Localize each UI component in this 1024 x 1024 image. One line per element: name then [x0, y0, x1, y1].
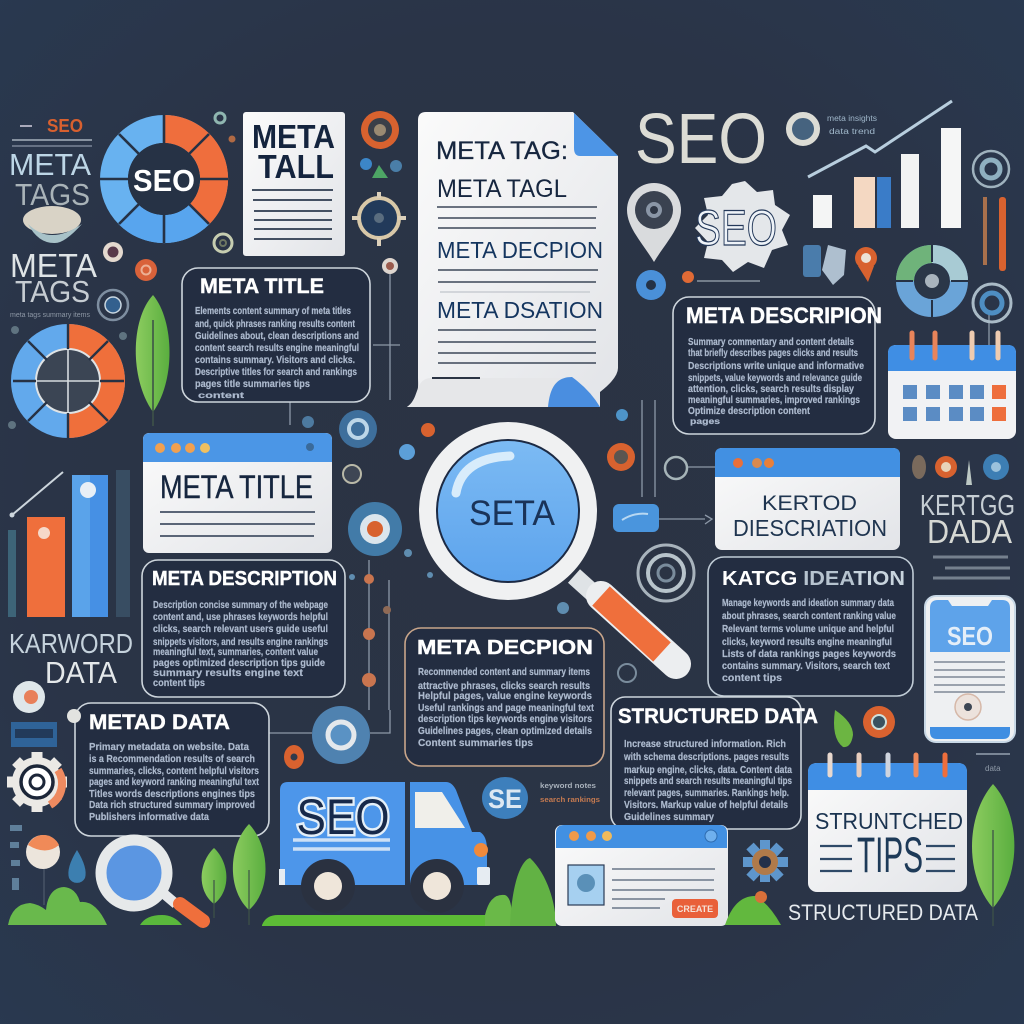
- left heading: META TAGS lower: [10, 247, 97, 319]
- text block: meta title body: and, quick phrases ranking results content: [195, 318, 355, 330]
- text block: meta description left body: content and, use phrases keywords helpful: [153, 611, 328, 623]
- icon: orange pin: [855, 247, 877, 282]
- text block: meta description left body: content tips: [153, 677, 205, 689]
- text block: meta title body: Elements content summary of meta titles: [195, 305, 351, 317]
- text block: centre body: Guidelines pages, clean optimized details: [418, 725, 592, 737]
- icon: target with orange core: [348, 502, 402, 556]
- panel: keyword ideation: [708, 557, 913, 696]
- icons: small pair right of browser: [912, 454, 1009, 485]
- icon: green leaf right: [972, 784, 1014, 926]
- icon: SEO gear badge: [695, 181, 790, 272]
- text block: metad data body: summaries, clicks, content helpful visitors: [89, 765, 259, 777]
- icon: orange ring lens right: [607, 443, 635, 471]
- text block: meta title body: Descriptive titles for search and rankings: [195, 366, 357, 378]
- phone: [925, 596, 1015, 742]
- browser card: keyword description: DIESCRIATION: [733, 515, 887, 541]
- icon: blue connector: [613, 504, 659, 532]
- text block: structured data body: relevant pages, summaries. Rankings help.: [624, 787, 789, 799]
- text block: structured data body: [623, 738, 792, 823]
- button: [672, 899, 718, 918]
- calendar: right: [888, 333, 1016, 439]
- thumbnail: [568, 865, 604, 905]
- text block: keyword ideation body: Relevant terms volume unique and helpful: [722, 623, 894, 635]
- icon: ring lens right small: [616, 409, 687, 479]
- text block: metad data body: Primary metadata on website. Data: [89, 741, 249, 753]
- panel: meta decription centre: [405, 628, 604, 766]
- bush centre: [485, 858, 556, 926]
- text block: meta description left body: clicks, search relevant users guide useful: [153, 623, 328, 635]
- hills and balloon left: [8, 835, 182, 925]
- calendar: structured tips: STRUNTCHED: [815, 808, 963, 834]
- icon: orange drop: [284, 745, 304, 769]
- left heading: META TAGS lower: meta tags summary items: [10, 312, 90, 319]
- icon: paper cloud: [23, 206, 82, 243]
- icon: triangle cluster: [360, 158, 402, 178]
- text block: structured data body: Increase structured information. Rich: [624, 738, 786, 750]
- text block: meta description right body: Optimize description content: [688, 405, 810, 417]
- text block: centre body: description tips keywords engine visitors: [418, 713, 592, 725]
- icon: blue SE badge: [482, 777, 528, 819]
- text block: centre body: Recommended content and summary items: [418, 666, 590, 678]
- caption: orange note: keyword notes: [540, 781, 596, 790]
- text block: meta description right body: attention, clicks, search results display: [688, 383, 854, 395]
- icon: blue gear eye: [743, 840, 788, 903]
- icon: folded corner: [574, 113, 618, 156]
- text block: metad data body: Data rich structured summary improved: [89, 799, 255, 811]
- heading: meta description right: META DESCRIPION: [686, 303, 882, 328]
- text block: keyword ideation body: Lists of data rankings pages keywords: [722, 648, 896, 660]
- chart: left bars: [8, 470, 130, 617]
- donut: SEO: SEO: [133, 163, 195, 198]
- caption: chart note: data trend: [829, 127, 875, 136]
- heading: keyword ideation: KATCG IDEATION: [722, 568, 905, 590]
- text block: meta title body: content: [198, 391, 245, 400]
- icon: blue target circle: [312, 706, 370, 764]
- decorative connector lines: [269, 270, 989, 733]
- truck: [279, 782, 490, 913]
- icon: blue SE badge: SE: [488, 784, 522, 814]
- text block: meta description left body: [153, 599, 328, 689]
- text block: meta description left body: pages optimized description tips guide: [153, 657, 325, 669]
- icon: green leaf small: [834, 710, 853, 747]
- icon: gear left: [7, 752, 67, 812]
- text block: metad data body: [89, 741, 259, 823]
- text block: meta title body: Guidelines about, clean descriptions and: [195, 330, 359, 342]
- text block: meta description right body: that briefly describes pages clicks and results: [688, 347, 858, 359]
- heading: structured data: STRUCTURED DATA: [618, 705, 818, 728]
- calendar: structured tips: [808, 755, 967, 892]
- chart: rising bars: [808, 101, 961, 228]
- heading: meta description left: META DESCRIPTION: [152, 568, 337, 590]
- text block: meta title body: contains summary. Visitors and clicks.: [195, 354, 355, 366]
- connector node: [67, 709, 81, 723]
- page: META TALL: [243, 112, 345, 256]
- browser card: bottom: CREATE: [677, 904, 713, 914]
- panel: meta description left: [142, 560, 345, 697]
- document: meta tags: [407, 112, 618, 407]
- icon: compass badge: [352, 192, 406, 246]
- browser card: bottom: [555, 825, 728, 926]
- heading: big SEO: SEO: [635, 100, 767, 179]
- icon: orange ring: [863, 706, 895, 738]
- icon: SEO gear badge: SEO: [695, 200, 777, 256]
- icon: ring right: [973, 284, 1011, 322]
- icon: small dots lower centre: [349, 549, 636, 682]
- icon: target badge: [103, 242, 123, 262]
- text block: meta title body: content search results engine meaningful: [195, 342, 359, 354]
- icon: blue ring centre left: [339, 410, 377, 448]
- icon: blue ring: [98, 290, 128, 320]
- icon: location pin: [627, 183, 681, 262]
- left heading: META TAGS lower: META: [10, 247, 97, 284]
- truck: SEO: [296, 789, 390, 845]
- page: META TALL: TALL: [258, 148, 334, 185]
- icon: orange dot line: [682, 271, 760, 283]
- document: meta tags: META DSATION: [437, 297, 603, 323]
- left heading: META TAGS upper: [9, 147, 91, 212]
- panel: structured data: [611, 697, 818, 829]
- heading: KARWORD DATA left: DATA: [45, 655, 117, 690]
- caption: orange note: search rankings: [540, 795, 600, 804]
- left heading: small SEO: SEO: [47, 116, 83, 136]
- heading: meta decpion centre: META DECPION: [417, 637, 593, 659]
- calendar: structured tips: TIPS: [857, 827, 923, 883]
- panel: meta title: [182, 268, 370, 402]
- icon: green leaf left: [136, 295, 170, 426]
- text block: metad data body: Titles words descriptions engines tips: [89, 788, 255, 800]
- left heading: META TAGS upper: META: [9, 147, 91, 182]
- text block: meta description left body: snippets visitors, and results engine rankings: [153, 636, 328, 648]
- left heading: META TAGS lower: TAGS: [15, 274, 90, 309]
- text block: centre body: [418, 666, 594, 749]
- text block: keyword ideation body: contains summary. Visitors, search text: [722, 660, 890, 672]
- text block: keyword ideation body: [722, 597, 896, 684]
- heading: structured data bottom: STRUCTURED DATA: [788, 900, 978, 925]
- text block: meta description left body: meaningful text, summaries, content value: [153, 646, 318, 658]
- text block: structured data body: Visitors. Markup value of helpful details: [624, 799, 788, 811]
- icon: small grey dots: [8, 326, 127, 429]
- trees: [202, 824, 266, 925]
- browser card: keyword description: [715, 448, 900, 550]
- text block: meta description right body: Summary commentary and content details: [688, 336, 854, 348]
- text block: metad data body: Publishers informative data: [89, 811, 209, 823]
- browser card: meta title: [143, 433, 332, 553]
- caption: chart note: [827, 114, 877, 136]
- timeline: orange dots: [362, 574, 391, 687]
- heading: KERTGG DADA right: DADA: [927, 513, 1012, 550]
- text block: centre body: attractive phrases, clicks search results: [418, 680, 590, 692]
- text block: structured data body: markup engine, clicks, data. Content data: [624, 764, 792, 776]
- donut: target: [13, 324, 124, 438]
- icon: badge on line: [382, 258, 398, 274]
- icon: orange ring top: [361, 111, 399, 149]
- bush right of browser: [725, 896, 781, 925]
- document: meta tags: META TAGL: [437, 175, 567, 203]
- ground: [262, 915, 520, 926]
- caption: orange note: [540, 781, 600, 804]
- panel: meta description right: [673, 297, 882, 434]
- text block: meta description left body: Description concise summary of the webpage: [153, 599, 328, 611]
- text block: structured data body: snippets and search results meaningful tips: [624, 775, 792, 787]
- icon: concentric rings: [638, 545, 694, 601]
- caption: right of calendar: [976, 754, 1010, 773]
- phone: SEO: [947, 621, 993, 651]
- left icon: blue strip: [11, 722, 57, 747]
- browser card: keyword description: KERTOD: [762, 492, 857, 515]
- heading: meta title: META TITLE: [200, 275, 324, 298]
- left icon: small notes: [10, 825, 22, 890]
- text block: meta description left body: summary results engine text: [153, 667, 304, 679]
- text block: meta title body: [195, 305, 359, 400]
- icon: ring target top right: [973, 151, 1009, 187]
- icon: small shield cluster: [803, 245, 846, 285]
- panel: metad data: [75, 703, 269, 836]
- text block: meta title body: pages title summaries tips: [195, 378, 310, 390]
- icon: small magnifier: [101, 840, 203, 921]
- heading: KARWORD DATA left: KARWORD: [9, 628, 133, 659]
- text block: metad data body: pages and keyword ranking meaningful text: [89, 776, 259, 788]
- text block: keyword ideation body: clicks, keyword results engine meaningful: [722, 636, 892, 648]
- text block: structured data body: with schema descriptions. pages results: [623, 751, 789, 763]
- text block: centre body: Helpful pages, value engine keywords: [418, 690, 592, 702]
- document: meta tags: META TAG:: [436, 137, 568, 165]
- icon: ring top left: [215, 113, 236, 142]
- text block: keyword ideation body: about phrases, search content ranking value: [722, 610, 896, 622]
- text block: centre body: Content summaries tips: [418, 737, 533, 749]
- icon: blue ring badge: [636, 270, 666, 300]
- text block: centre body: Useful rankings and page meaningful text: [418, 702, 594, 714]
- text block: meta description right body: snippets, value keywords and relevance guide: [688, 372, 862, 384]
- donut: status ring: [896, 245, 968, 317]
- left heading: small SEO: [12, 116, 92, 147]
- page: META TALL: META: [252, 118, 335, 155]
- icon: orange swirl: [135, 259, 157, 281]
- icon: blue droplet: [68, 850, 86, 883]
- caption: right of calendar: data: [985, 764, 1001, 773]
- text block: meta description right body: Descriptions write unique and informative: [688, 360, 864, 372]
- browser card: meta title: META TITLE: [160, 469, 313, 505]
- text block: meta description right body: pages: [690, 417, 721, 426]
- left heading: META TAGS upper: TAGS: [15, 177, 90, 212]
- text block: keyword ideation body: content tips: [722, 672, 782, 684]
- text block: metad data body: is a Recommendation results of search: [89, 753, 255, 765]
- icon: white ring: [789, 115, 817, 143]
- heading: metad data: METAD DATA: [89, 711, 230, 734]
- text block: keyword ideation body: Manage keywords and ideation summary data: [722, 597, 894, 609]
- icon: olive ring: [214, 234, 232, 252]
- text block: structured data body: Guidelines summary: [624, 811, 714, 823]
- text block: meta description right body: [688, 336, 864, 426]
- heading: KERTGG DADA right: [920, 490, 1015, 578]
- magnifying glass: SETA: [469, 494, 556, 533]
- donut: SEO: [100, 115, 228, 243]
- icon: small dots around the lens: [302, 416, 435, 483]
- document: meta tags: META DECPION: [437, 237, 603, 263]
- text block: meta description right body: meaningful summaries, improved rankings: [688, 394, 860, 406]
- heading: KARWORD DATA left: [9, 628, 133, 690]
- icon: orange thermometer: [983, 197, 1006, 271]
- handle: [574, 576, 676, 664]
- magnifying glass: [428, 431, 676, 664]
- left icon: target on white: [13, 681, 45, 713]
- caption: chart note: meta insights: [827, 114, 877, 123]
